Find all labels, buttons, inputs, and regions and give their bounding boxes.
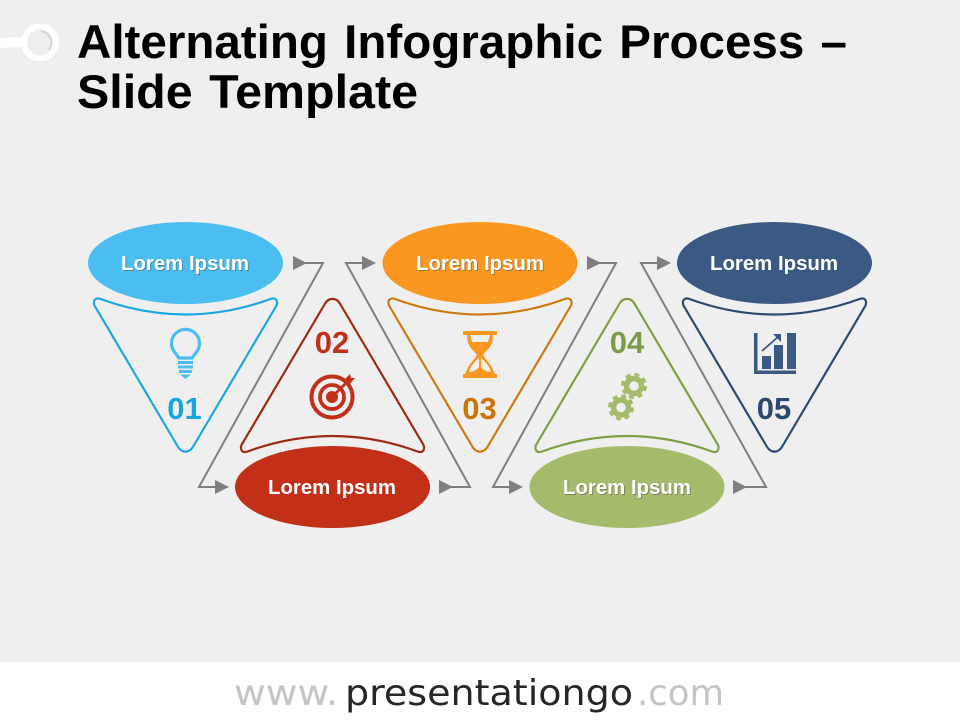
- icon: gears: [610, 375, 645, 418]
- title: Slide Template: [77, 65, 418, 118]
- arrow: connector 01 to 02: [199, 256, 323, 494]
- footer website text: www.: [234, 673, 338, 714]
- step 02: [235, 299, 430, 528]
- number 02: 02: [315, 325, 349, 360]
- footer website text: presentationgo: [345, 673, 633, 714]
- number 01: 01: [167, 391, 202, 426]
- icon: target with arrow: [312, 374, 355, 418]
- step 05: [677, 222, 872, 452]
- footer website text: .com: [637, 673, 724, 714]
- oval: step 03 label: Lorem Ipsum: [416, 252, 544, 275]
- footer website text: [234, 673, 724, 714]
- oval: step 02 label: Lorem Ipsum: [268, 476, 396, 499]
- icon: white ring pin decoration: [0, 26, 56, 58]
- outline: step 03 triangle: [388, 298, 572, 452]
- oval: step 03 label: [382, 222, 578, 304]
- oval: step 01 label: [88, 222, 283, 304]
- number 05: 05: [757, 391, 791, 426]
- outline: step 01 triangle: [94, 298, 277, 452]
- outline: step 04 triangle: [535, 299, 719, 452]
- oval: step 01 label: Lorem Ipsum: [121, 252, 249, 275]
- oval: step 04 label: Lorem Ipsum: [563, 476, 691, 499]
- oval: step 05 label: Lorem Ipsum: [710, 252, 838, 275]
- step 04: [530, 299, 724, 528]
- arrow: connector 03 to 04: [493, 256, 616, 494]
- title: Alternating Infographic Process –: [77, 15, 847, 68]
- oval: step 02 label: [235, 446, 430, 528]
- number 03: 03: [462, 391, 497, 426]
- icon: light bulb: [171, 329, 200, 379]
- step 03: [382, 222, 578, 452]
- outline: step 05 triangle: [683, 298, 866, 452]
- arrow: connector 02 to 03: [346, 256, 470, 494]
- outline: step 02 triangle: [241, 299, 424, 452]
- step 01: [88, 222, 283, 452]
- oval: step 05 label: [677, 222, 872, 304]
- title: [77, 15, 847, 118]
- footer band: [0, 662, 960, 720]
- icon: hourglass: [463, 331, 497, 378]
- oval: step 04 label: [530, 446, 724, 528]
- number 04: 04: [610, 325, 645, 360]
- icon: rising bar chart: [754, 333, 796, 374]
- arrow: connector 04 to 05: [641, 256, 766, 494]
